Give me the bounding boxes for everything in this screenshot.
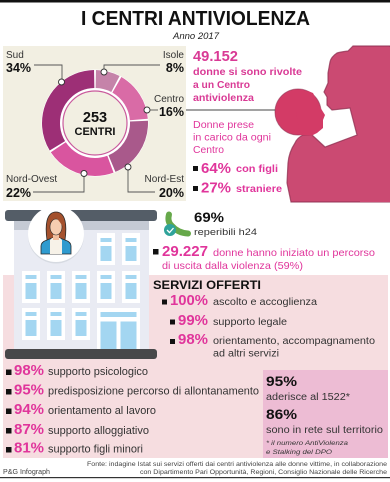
service: 81% minor children: 81% — [14, 441, 44, 457]
label: Nord-Ovest: 22% — [6, 186, 31, 200]
service: 98% guidance: 98% — [178, 332, 208, 348]
service: 94% job guidance: orientamento al lavoro — [48, 405, 156, 417]
text block: women who turned to a centre: donne si sono rivolte — [193, 67, 302, 78]
callout: network membership: sono in rete sul territorio — [266, 425, 383, 436]
stat: 69% available 24h: reperibili h24 — [194, 227, 257, 238]
label: Isole: 8% — [166, 61, 184, 75]
stat: 64% with children — [193, 161, 278, 177]
label: Isole: Isole — [163, 50, 184, 61]
label: Nord-Est: 20% — [159, 186, 184, 200]
callout: network membership: * il numero AntiViolenza — [266, 440, 348, 447]
service: 87% housing: 87% — [14, 422, 44, 438]
donut centre label: 253 — [83, 110, 107, 126]
text block: women taken in charge per centre — [193, 120, 271, 156]
text block: women who turned to a centre: antiviolenza — [193, 93, 254, 104]
stat: 64% with children: 64% — [201, 161, 231, 177]
service: 98% guidance: ad altri servizi — [213, 348, 279, 360]
text block: women taken in charge per centre: in carico da ogni — [193, 132, 271, 144]
service: 95% removal plan: predisposizione percorso di allontanamento — [48, 386, 259, 398]
stat: 29.227 women started a path: di uscita dalla violenza (59%) — [162, 260, 303, 272]
service: 87% housing — [6, 422, 149, 438]
service: 95% removal plan — [6, 383, 259, 399]
title: I CENTRI ANTIVIOLENZA — [81, 8, 310, 30]
service: 100% listening: ascolto e accoglienza — [213, 297, 317, 308]
text block: women taken in charge per centre: Donne prese — [193, 120, 254, 131]
service: 98% psychological: supporto psicologico — [48, 366, 148, 378]
service: 100% listening: 100% — [170, 293, 208, 309]
stat: 69% available 24h — [194, 209, 257, 238]
stat: 29.227 women started a path: donne hanno iniziato un percorso — [213, 247, 375, 259]
label: Sud: 34% — [6, 61, 31, 75]
text block: women taken in charge per centre: Centro — [193, 145, 224, 156]
service: 98% guidance: orientamento, accompagnamento — [213, 336, 375, 347]
stat: 29.227 women started a path: 29.227 — [162, 243, 208, 260]
label: Nord-Ovest: Nord-Ovest — [6, 174, 57, 185]
stat: 27% foreign: straniere — [236, 184, 282, 195]
service: 98% psychological — [6, 363, 148, 379]
stat: 27% foreign: 27% — [201, 180, 231, 196]
callout: network membership — [263, 370, 388, 458]
service: 99% legal: supporto legale — [213, 317, 287, 328]
icon: green phone with check badge — [164, 214, 188, 236]
service: 100% listening — [162, 293, 317, 309]
text block: women who turned to a centre: a un Centro — [193, 80, 250, 91]
service: 99% legal — [170, 313, 287, 329]
label: Nord-Est: Nord-Est — [145, 174, 184, 185]
donut centre label: CENTRI — [75, 126, 115, 138]
stat: 69% available 24h: 69% — [194, 209, 225, 225]
service: 98% psychological: 98% — [14, 363, 44, 379]
callout: network membership: e Stalking del DPO — [266, 449, 332, 456]
service: 98% guidance — [170, 332, 375, 360]
label: Centro: Centro — [154, 94, 184, 105]
stat: 29.227 women started a path — [153, 243, 375, 272]
heading: services offered: SERVIZI OFFERTI — [153, 278, 261, 292]
illustration: building — [5, 210, 157, 359]
text block: women who turned to a centre: 49.152 — [193, 49, 238, 65]
stat: 64% with children: con figli — [236, 164, 278, 175]
label: Sud: Sud — [6, 50, 24, 61]
label: Sud — [6, 50, 31, 75]
source note: con Dipartimento Pari Opportunità, Regioni, Consiglio Nazionale delle Ricerche — [140, 469, 387, 476]
service: 94% job guidance — [6, 402, 156, 418]
credit: P&G Infograph — [3, 469, 50, 476]
text block: women who turned to a centre — [193, 49, 302, 104]
label: Isole — [163, 50, 184, 75]
service: 87% housing: supporto alloggiativo — [48, 425, 149, 437]
label: Centro — [154, 94, 184, 119]
panel: donut chart of centres by area — [3, 46, 186, 201]
source note — [87, 461, 387, 476]
callout: network membership: 86% — [266, 406, 298, 422]
callout: network membership: aderisce al 1522* — [266, 392, 350, 403]
callout: network membership: 95% — [266, 373, 298, 389]
service: 81% minor children: supporto figli minori — [48, 444, 143, 456]
service: 81% minor children — [6, 441, 143, 457]
service: 95% removal plan: 95% — [14, 383, 44, 399]
label: Centro: 16% — [159, 105, 184, 119]
label: Nord-Ovest — [6, 174, 57, 200]
illustration: mother and child silhouette — [275, 46, 390, 202]
source note: Fonte: indagine Istat sui servizi offerti dai centri antiviolenza alle donne vittime, in collaborazione — [87, 461, 387, 468]
service: 99% legal: 99% — [178, 313, 208, 329]
icon: woman avatar — [28, 206, 84, 264]
panel: pink services background — [3, 275, 388, 458]
label: Nord-Est — [145, 174, 184, 200]
donut centre label — [75, 110, 115, 138]
service: 94% job guidance: 94% — [14, 402, 44, 418]
subtitle: year: Anno 2017 — [172, 31, 220, 42]
stat: 27% foreign — [193, 180, 282, 196]
